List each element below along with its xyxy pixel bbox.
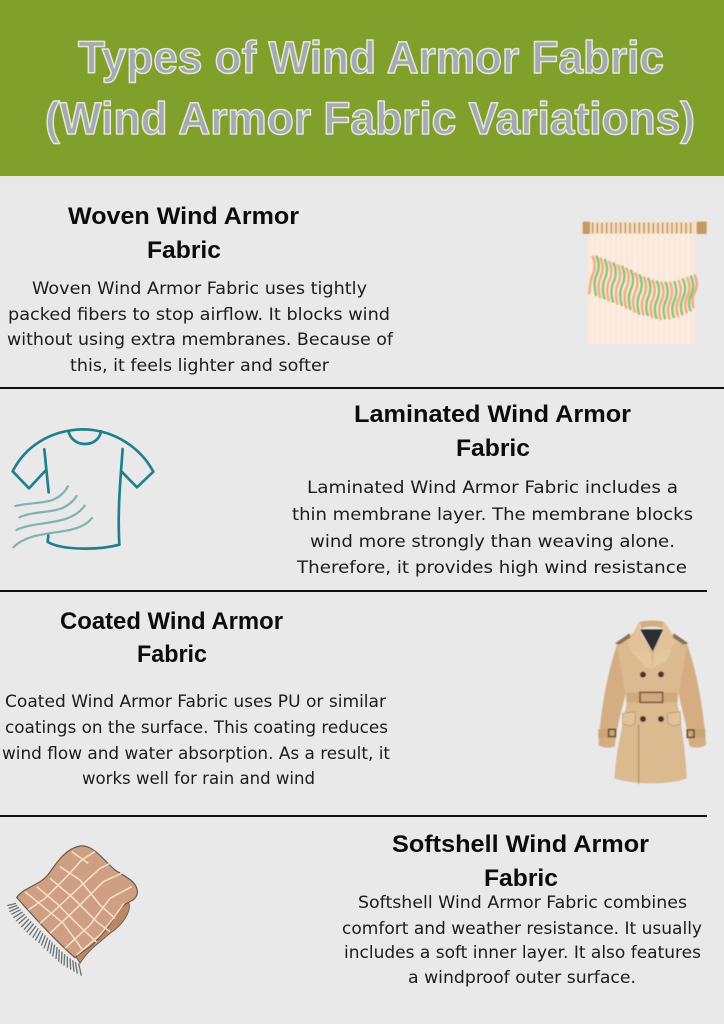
text block: coated description <box>2 692 390 789</box>
text block: softshell description: Softshell Wind Armor Fabric combines <box>358 893 687 913</box>
heading: woven <box>68 203 299 264</box>
divider 3 <box>0 815 707 817</box>
text block: softshell description: includes a soft inner layer. It also features <box>344 943 701 963</box>
text block: laminated description: Laminated Wind Armor Fabric includes a <box>307 478 678 498</box>
heading: softshell: Softshell Wind Armor <box>392 831 649 858</box>
text block: softshell description <box>342 893 702 988</box>
heading: softshell <box>392 831 649 892</box>
heading: laminated <box>354 401 631 462</box>
text block: coated description: Coated Wind Armor Fabric uses PU or similar <box>5 692 387 712</box>
divider 1 <box>0 387 724 389</box>
text block: softshell description: comfort and weather resistance. It usually <box>342 919 702 939</box>
text block: laminated description: thin membrane layer. The membrane blocks <box>292 505 693 525</box>
icon: loom with woven strands <box>583 222 707 344</box>
text block: softshell description: a windproof outer surface. <box>408 968 636 988</box>
icon: plaid blanket <box>7 846 137 976</box>
panel: woven wind armor fabric <box>7 203 707 376</box>
heading: woven: Woven Wind Armor <box>68 203 299 230</box>
heading: laminated: Fabric <box>456 435 530 462</box>
icon: t-shirt with wind <box>13 429 153 549</box>
heading: coated: Fabric <box>137 641 207 668</box>
title banner: (Wind Armor Fabric Variations) <box>45 93 695 144</box>
text block: woven description: this, it feels lighter and softer <box>70 356 330 376</box>
panel: softshell wind armor fabric <box>7 831 702 988</box>
title banner <box>0 0 724 176</box>
text block: coated description: wind flow and water absorption. As a result, it <box>2 744 390 764</box>
heading: softshell: Fabric <box>484 865 558 892</box>
text block: coated description: works well for rain and wind <box>82 769 315 789</box>
panel: laminated wind armor fabric <box>13 401 693 578</box>
heading: laminated: Laminated Wind Armor <box>354 401 631 428</box>
divider 2 <box>0 590 707 592</box>
text block: woven description: without using extra membranes. Because of <box>7 330 394 350</box>
text block: woven description: packed fibers to stop airflow. It blocks wind <box>8 305 390 325</box>
text block: laminated description <box>292 478 693 578</box>
heading: woven: Fabric <box>147 237 221 264</box>
text block: woven description <box>7 279 394 376</box>
heading: coated <box>60 608 283 668</box>
text block: laminated description: Therefore, it provides high wind resistance <box>296 558 687 578</box>
icon: trench coat <box>598 620 706 784</box>
title banner: Types of Wind Armor Fabric <box>78 32 664 83</box>
text block: woven description: Woven Wind Armor Fabric uses tightly <box>32 279 367 299</box>
text block: laminated description: wind more strongly than weaving alone. <box>310 532 675 552</box>
text block: coated description: coatings on the surface. This coating reduces <box>5 718 388 738</box>
heading: coated: Coated Wind Armor <box>60 608 283 635</box>
panel: coated wind armor fabric <box>2 608 706 789</box>
